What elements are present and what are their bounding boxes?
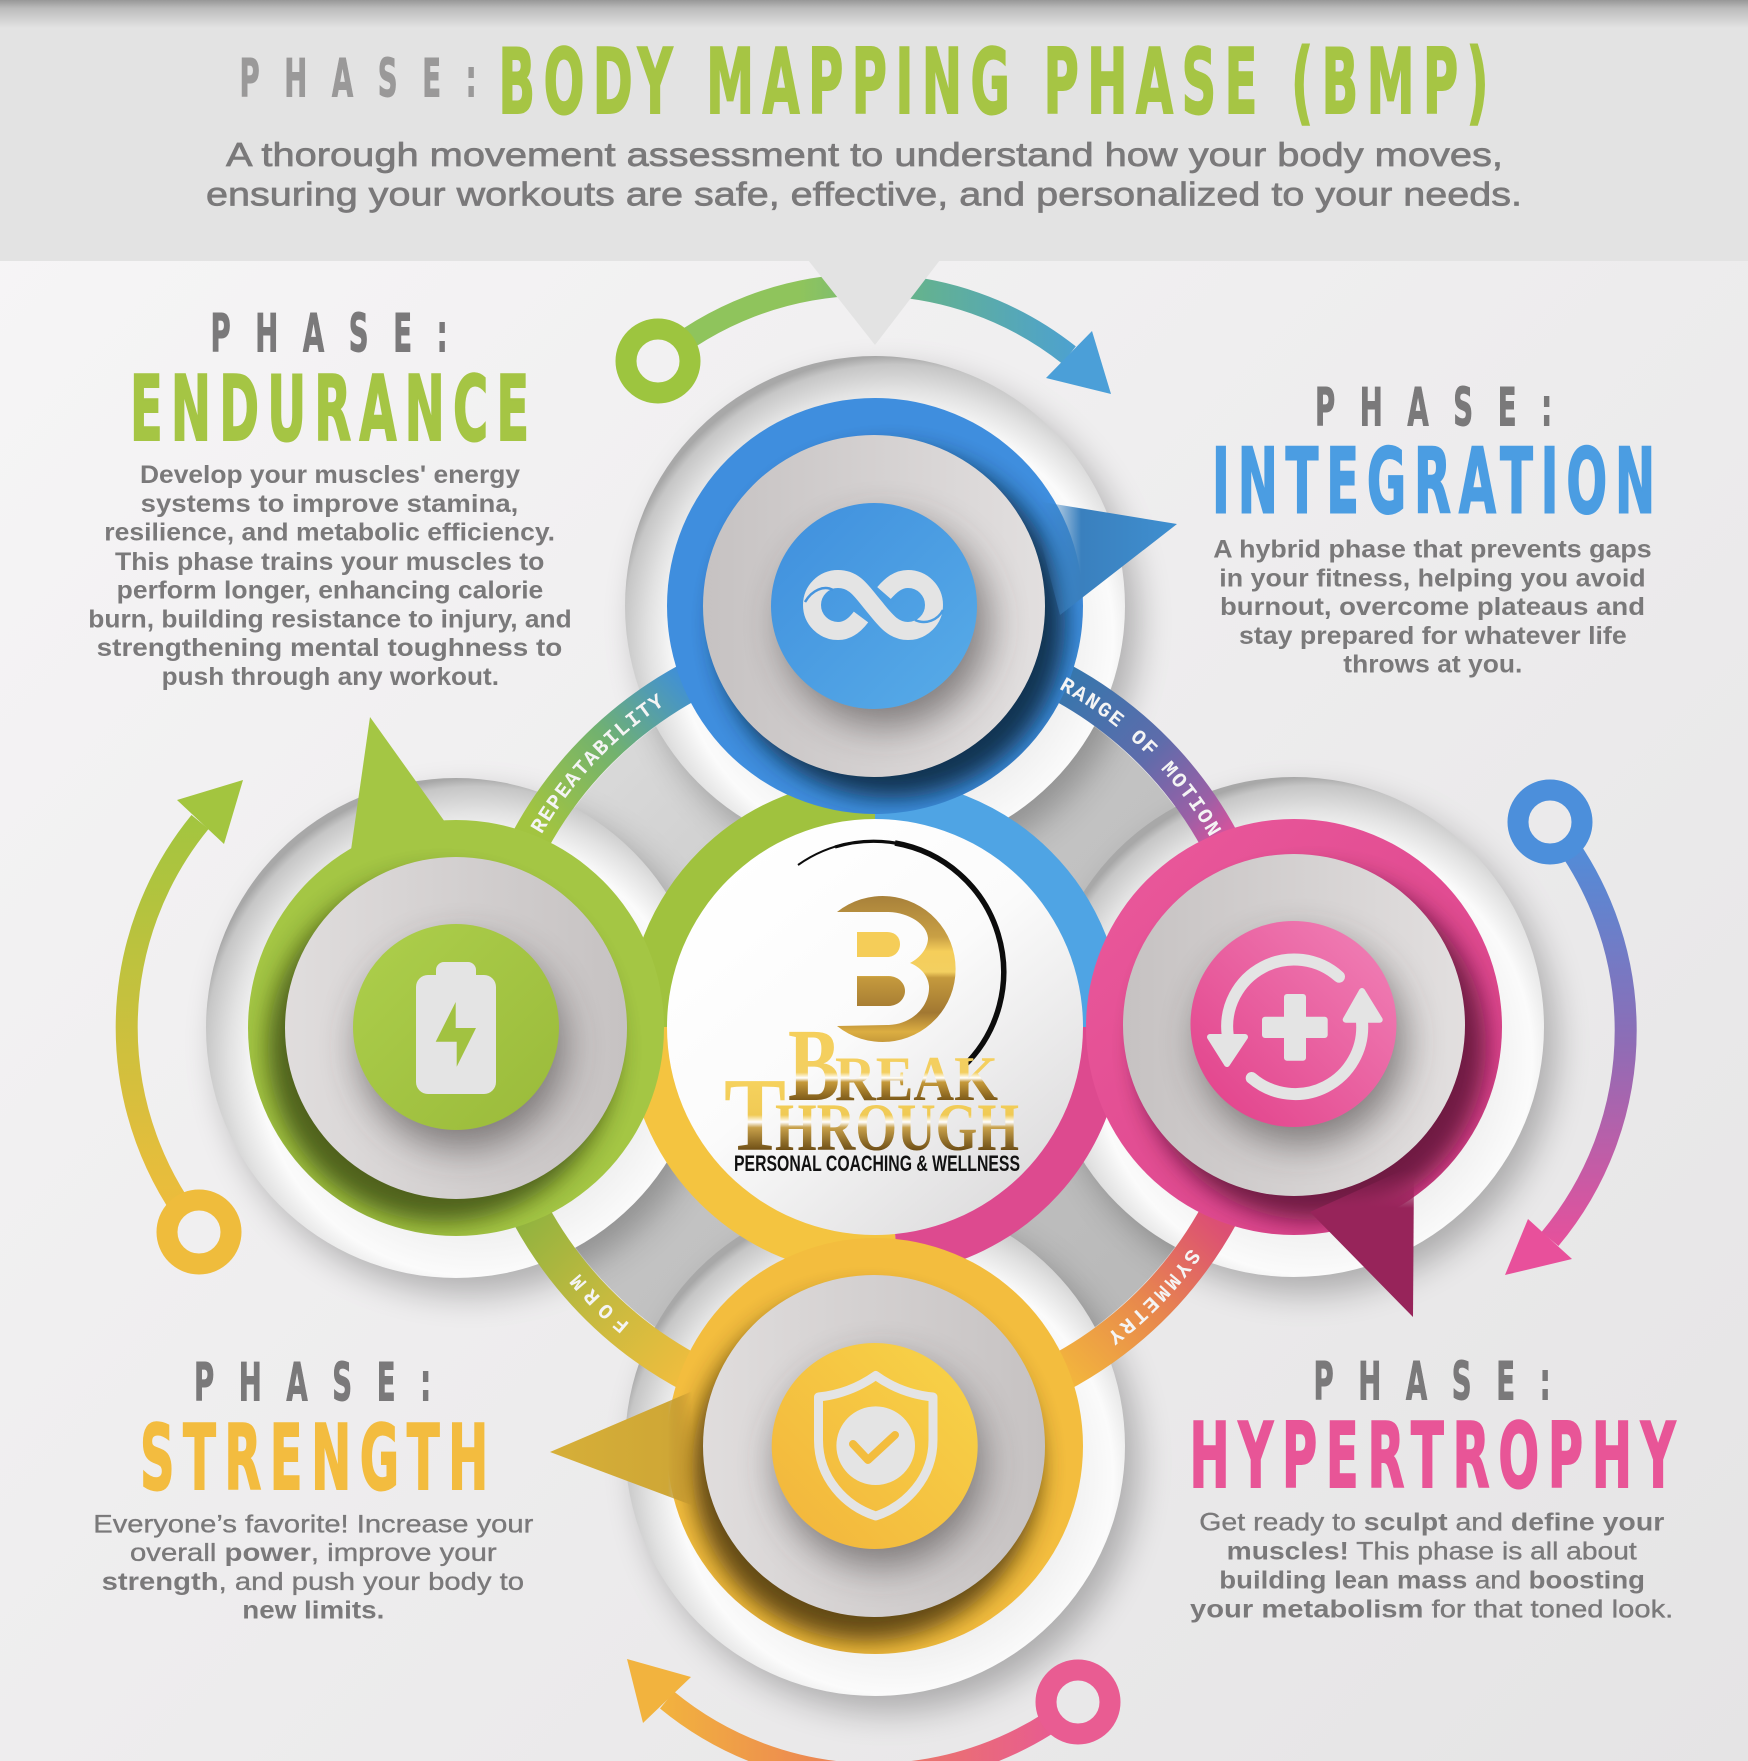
connector arc: symmetry band [1009, 1128, 1254, 1395]
central gray backdrop disc [503, 655, 1247, 1399]
description: push through any workout. [162, 663, 499, 691]
node: integration [667, 398, 1177, 814]
connector label: symmetry: SYMMETRY [1110, 1250, 1200, 1346]
logo wordmark: HROUGH [775, 1089, 1019, 1165]
panel: integration text [1212, 377, 1655, 678]
description: burnout, overcome plateaus and [1220, 593, 1645, 621]
connector label: form: FORM [569, 1274, 629, 1334]
central four colour ring [647, 799, 1103, 1255]
description: strength , and push your body to [102, 1568, 524, 1596]
description [1213, 536, 1652, 678]
connector arc: range of motion band [1009, 659, 1254, 926]
logo tagline: PERSONAL COACHING & WELLNESS [734, 1151, 1020, 1176]
description: new limits. [242, 1597, 384, 1625]
description: throws at you. [1343, 650, 1522, 678]
connector label: range of motion: RANGE OF MOTION [1060, 677, 1222, 836]
heading: ENDURANCE [130, 358, 529, 462]
description: your metabolism for that toned look. [1190, 1595, 1673, 1623]
description: strengthening mental toughness to [97, 634, 562, 662]
centre logo disc [667, 819, 1083, 1235]
header description: ensuring your workouts are safe, effective, and personalized to your needs. [206, 176, 1522, 212]
logo wordmark: T [724, 1056, 786, 1173]
header panel [0, 0, 1748, 345]
panel: strength text [93, 1352, 533, 1625]
logo wordmark: B [788, 1008, 840, 1123]
cycle arrow: pink to yellow [627, 1659, 1110, 1761]
label: PHASE: [1315, 377, 1552, 438]
description: resilience, and metabolic efficiency. [104, 519, 555, 547]
pointer: integration [1030, 500, 1177, 615]
header description [206, 136, 1522, 212]
description: in your fitness, helping you avoid [1219, 565, 1646, 593]
heading: STRENGTH [140, 1407, 488, 1511]
pointer: endurance [351, 717, 445, 850]
description [93, 1510, 533, 1625]
connector label: repeatability: REPEATABILITY [530, 692, 661, 834]
description: perform longer, enhancing calorie [117, 576, 543, 604]
node: endurance [248, 717, 664, 1236]
description: Everyone’s favorite! Increase your [93, 1510, 533, 1538]
description [1190, 1509, 1673, 1623]
node: hypertrophy [1086, 819, 1502, 1317]
description: A hybrid phase that prevents gaps [1213, 536, 1652, 564]
node: strength [550, 1238, 1083, 1654]
description: building lean mass and boosting [1219, 1566, 1645, 1594]
description: stay prepared for whatever life [1239, 622, 1627, 650]
icon: shield with check [818, 1376, 933, 1516]
logo wordmark [724, 1008, 1019, 1173]
cycle arrow: green to blue [626, 285, 1111, 394]
pointer: hypertrophy [1310, 1165, 1414, 1317]
icon: infinity [805, 579, 943, 631]
header title: BODY MAPPING PHASE (BMP) [498, 31, 1489, 135]
connector arc: repeatability band [496, 659, 741, 926]
soft halo plates [206, 356, 1556, 1712]
icon: cycle with cross [1210, 959, 1380, 1094]
header pointer [808, 260, 940, 345]
description: overall power , improve your [130, 1539, 497, 1567]
description: This phase trains your muscles to [115, 548, 544, 576]
logo swoosh [798, 841, 1004, 1067]
cycle arrow: blue to pink [1505, 790, 1626, 1275]
label: PHASE: [210, 303, 448, 364]
logo wordmark: REAK [835, 1044, 998, 1114]
header label: PHASE: [240, 48, 477, 109]
description: burn, building resistance to injury, and [88, 605, 572, 633]
heading: HYPERTROPHY [1190, 1405, 1677, 1509]
description [88, 461, 572, 691]
header description: A thorough movement assessment to understand how your body moves, [226, 136, 1503, 173]
connector arc: form band [496, 1128, 741, 1395]
label: PHASE: [194, 1352, 431, 1413]
panel: hypertrophy text [1190, 1351, 1677, 1623]
heading: INTEGRATION [1212, 430, 1655, 535]
description: Get ready to sculpt and define your [1199, 1509, 1665, 1537]
icon: battery [416, 962, 496, 1094]
panel: endurance text [88, 303, 572, 691]
description: Develop your muscles' energy [140, 461, 520, 489]
logo gold B [837, 896, 956, 1042]
pointer: strength [550, 1387, 702, 1509]
label: PHASE: [1314, 1351, 1551, 1412]
cycle arrow: yellow to green [127, 780, 243, 1264]
description: muscles! This phase is all about [1227, 1537, 1637, 1565]
description: systems to improve stamina, [141, 490, 518, 518]
